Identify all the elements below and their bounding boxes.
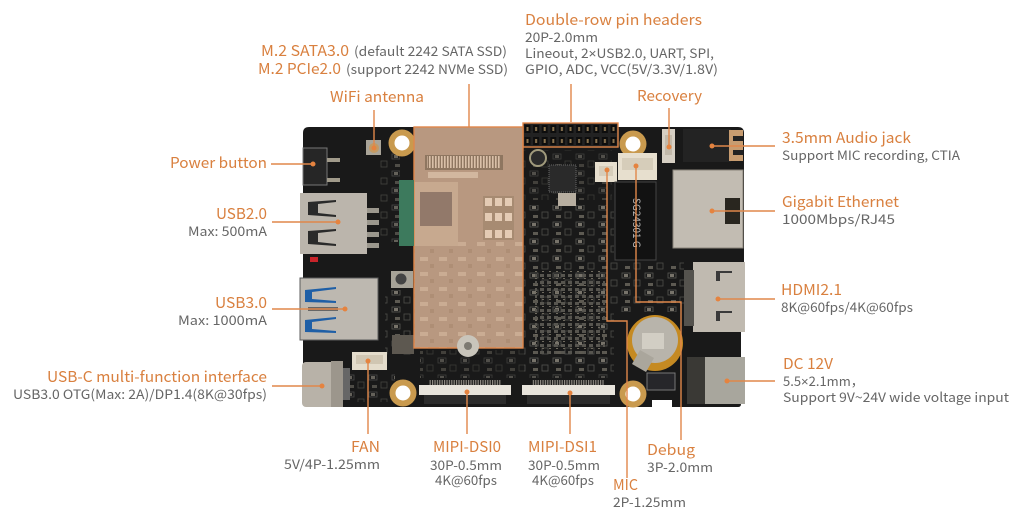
- label: MIPI-DSI0: [430, 436, 502, 489]
- mounting hole: bottom left: [390, 380, 416, 406]
- FAN connector: [352, 352, 387, 370]
- chip: network controller: [549, 165, 576, 192]
- label: USB-C multi-function interface: USB-C multi-function interface: [47, 366, 267, 387]
- label: USB2.0: Max: 500mA: [188, 221, 267, 240]
- USB3.0 port: [300, 278, 378, 340]
- label: M.2 slot: (default 2242 SATA SSD): [354, 41, 507, 60]
- WiFi module: [414, 182, 458, 246]
- label: M.2 slot: M.2 PCIe2.0: [258, 58, 341, 79]
- label: USB2.0: USB2.0: [216, 203, 267, 224]
- label: USB-C multi-function interface: USB3.0 OTG(Max: 2A)/DP1.4(8K@30fps): [13, 384, 267, 403]
- label: M.2 slot: [258, 40, 508, 79]
- label: FAN: 5V/4P-1.25mm: [284, 454, 380, 473]
- label: double-row pin headers: 20P-2.0mm: [525, 27, 598, 46]
- label: MIPI-DSI0: MIPI-DSI0: [433, 436, 501, 457]
- label: USB2.0: [188, 203, 267, 240]
- label: MIC: MIC: [613, 474, 638, 495]
- label: DC 12V: DC 12V: [783, 353, 833, 374]
- label: WiFi antenna: WiFi antenna: [330, 86, 424, 107]
- label: MIPI-DSI1: 30P-0.5mm: [528, 455, 600, 474]
- label: MIPI-DSI1: 4K@60fps: [532, 470, 594, 489]
- label: Debug: [647, 439, 713, 476]
- label: Gigabit Ethernet: 1000Mbps/RJ45: [782, 209, 895, 228]
- WiFi module left part: [399, 180, 414, 246]
- label: double-row pin headers: Double-row pin headers: [525, 9, 702, 30]
- label: Gigabit Ethernet: Gigabit Ethernet: [782, 191, 899, 212]
- label: FAN: FAN: [351, 436, 380, 457]
- main chip: [615, 182, 656, 260]
- reset button: [391, 271, 413, 288]
- WiFi antenna connector: [366, 140, 381, 155]
- pin header: [523, 123, 618, 147]
- label: 3.5mm audio jack: [782, 127, 960, 164]
- debug connector: [618, 153, 657, 180]
- capacitor: [530, 150, 546, 166]
- label: MIPI-DSI0: 4K@60fps: [435, 470, 497, 489]
- label: HDMI2.1: [781, 279, 913, 316]
- label: DC 12V: [783, 353, 1009, 406]
- mounting hole: bottom right: [620, 380, 646, 408]
- label: USB-C multi-function interface: [13, 366, 267, 403]
- mounting standoff: [457, 335, 479, 357]
- label: double-row pin headers: [525, 9, 718, 78]
- MIPI-DSI0 connector: [419, 380, 511, 404]
- label: MIPI-DSI0: 30P-0.5mm: [430, 455, 502, 474]
- inductor: [392, 335, 414, 354]
- panel: circuit board: [300, 123, 745, 408]
- label: FAN: [284, 436, 380, 473]
- coin battery: [627, 315, 683, 372]
- power button: [303, 148, 340, 185]
- Gigabit Ethernet port: [673, 170, 743, 248]
- DC 12V jack: [687, 357, 745, 404]
- main chip: SG24301 G: [630, 198, 645, 248]
- label: MIPI-DSI1: MIPI-DSI1: [528, 436, 597, 457]
- label: Recovery: Recovery: [637, 85, 702, 106]
- crystal: [558, 193, 576, 206]
- label: 3.5mm audio jack: Support MIC recording, CTIA: [782, 145, 960, 164]
- label: M.2 slot: (support 2242 NVMe SSD): [346, 59, 508, 78]
- USB-C port: [302, 361, 350, 407]
- label: double-row pin headers: Lineout, 2 ×USB2.0, UART, SPI,: [525, 43, 714, 62]
- label: DC 12V: Support 9V~24V wide voltage input: [783, 387, 1009, 406]
- label: HDMI2.1: 8K@60fps/4K@60fps: [781, 297, 913, 316]
- MIPI-DSI1 connector: [522, 380, 615, 404]
- label: double-row pin headers: GPIO, ADC, VCC(5V/3.3V/1.8V): [525, 59, 718, 78]
- label: USB3.0: USB3.0: [215, 292, 267, 313]
- label: MIPI-DSI1: [528, 436, 600, 489]
- label: 3.5mm audio jack: 3.5mm Audio jack: [782, 127, 912, 148]
- label: Debug: 3P-2.0mm: [647, 457, 713, 476]
- label: Debug: Debug: [647, 439, 696, 460]
- red LED: [310, 257, 318, 262]
- MIC connector: [595, 162, 617, 182]
- highlighted M.2 slot area: [414, 127, 523, 348]
- label: USB3.0: Max: 1000mA: [178, 310, 267, 329]
- audio jack: [683, 129, 743, 162]
- leader lines: [271, 84, 775, 478]
- HDMI port: [684, 262, 745, 332]
- label: Power button: Power button: [170, 152, 267, 173]
- diode: [647, 373, 675, 390]
- mounting hole: top left: [388, 130, 416, 156]
- label: HDMI2.1: HDMI2.1: [781, 279, 842, 300]
- label: MIC: 2P-1.25mm: [613, 492, 686, 511]
- label: Gigabit Ethernet: [782, 191, 899, 228]
- label: M.2 slot: M.2 SATA3.0: [261, 40, 349, 61]
- label: DC 12V: 5.5×2.1mm，: [783, 371, 864, 390]
- recovery button: [662, 129, 675, 163]
- component field: centre: [524, 205, 614, 375]
- label: USB3.0: [178, 292, 267, 329]
- USB2.0 port: [300, 193, 379, 254]
- mounting hole: top right: [620, 130, 646, 158]
- label: MIC: [613, 474, 686, 511]
